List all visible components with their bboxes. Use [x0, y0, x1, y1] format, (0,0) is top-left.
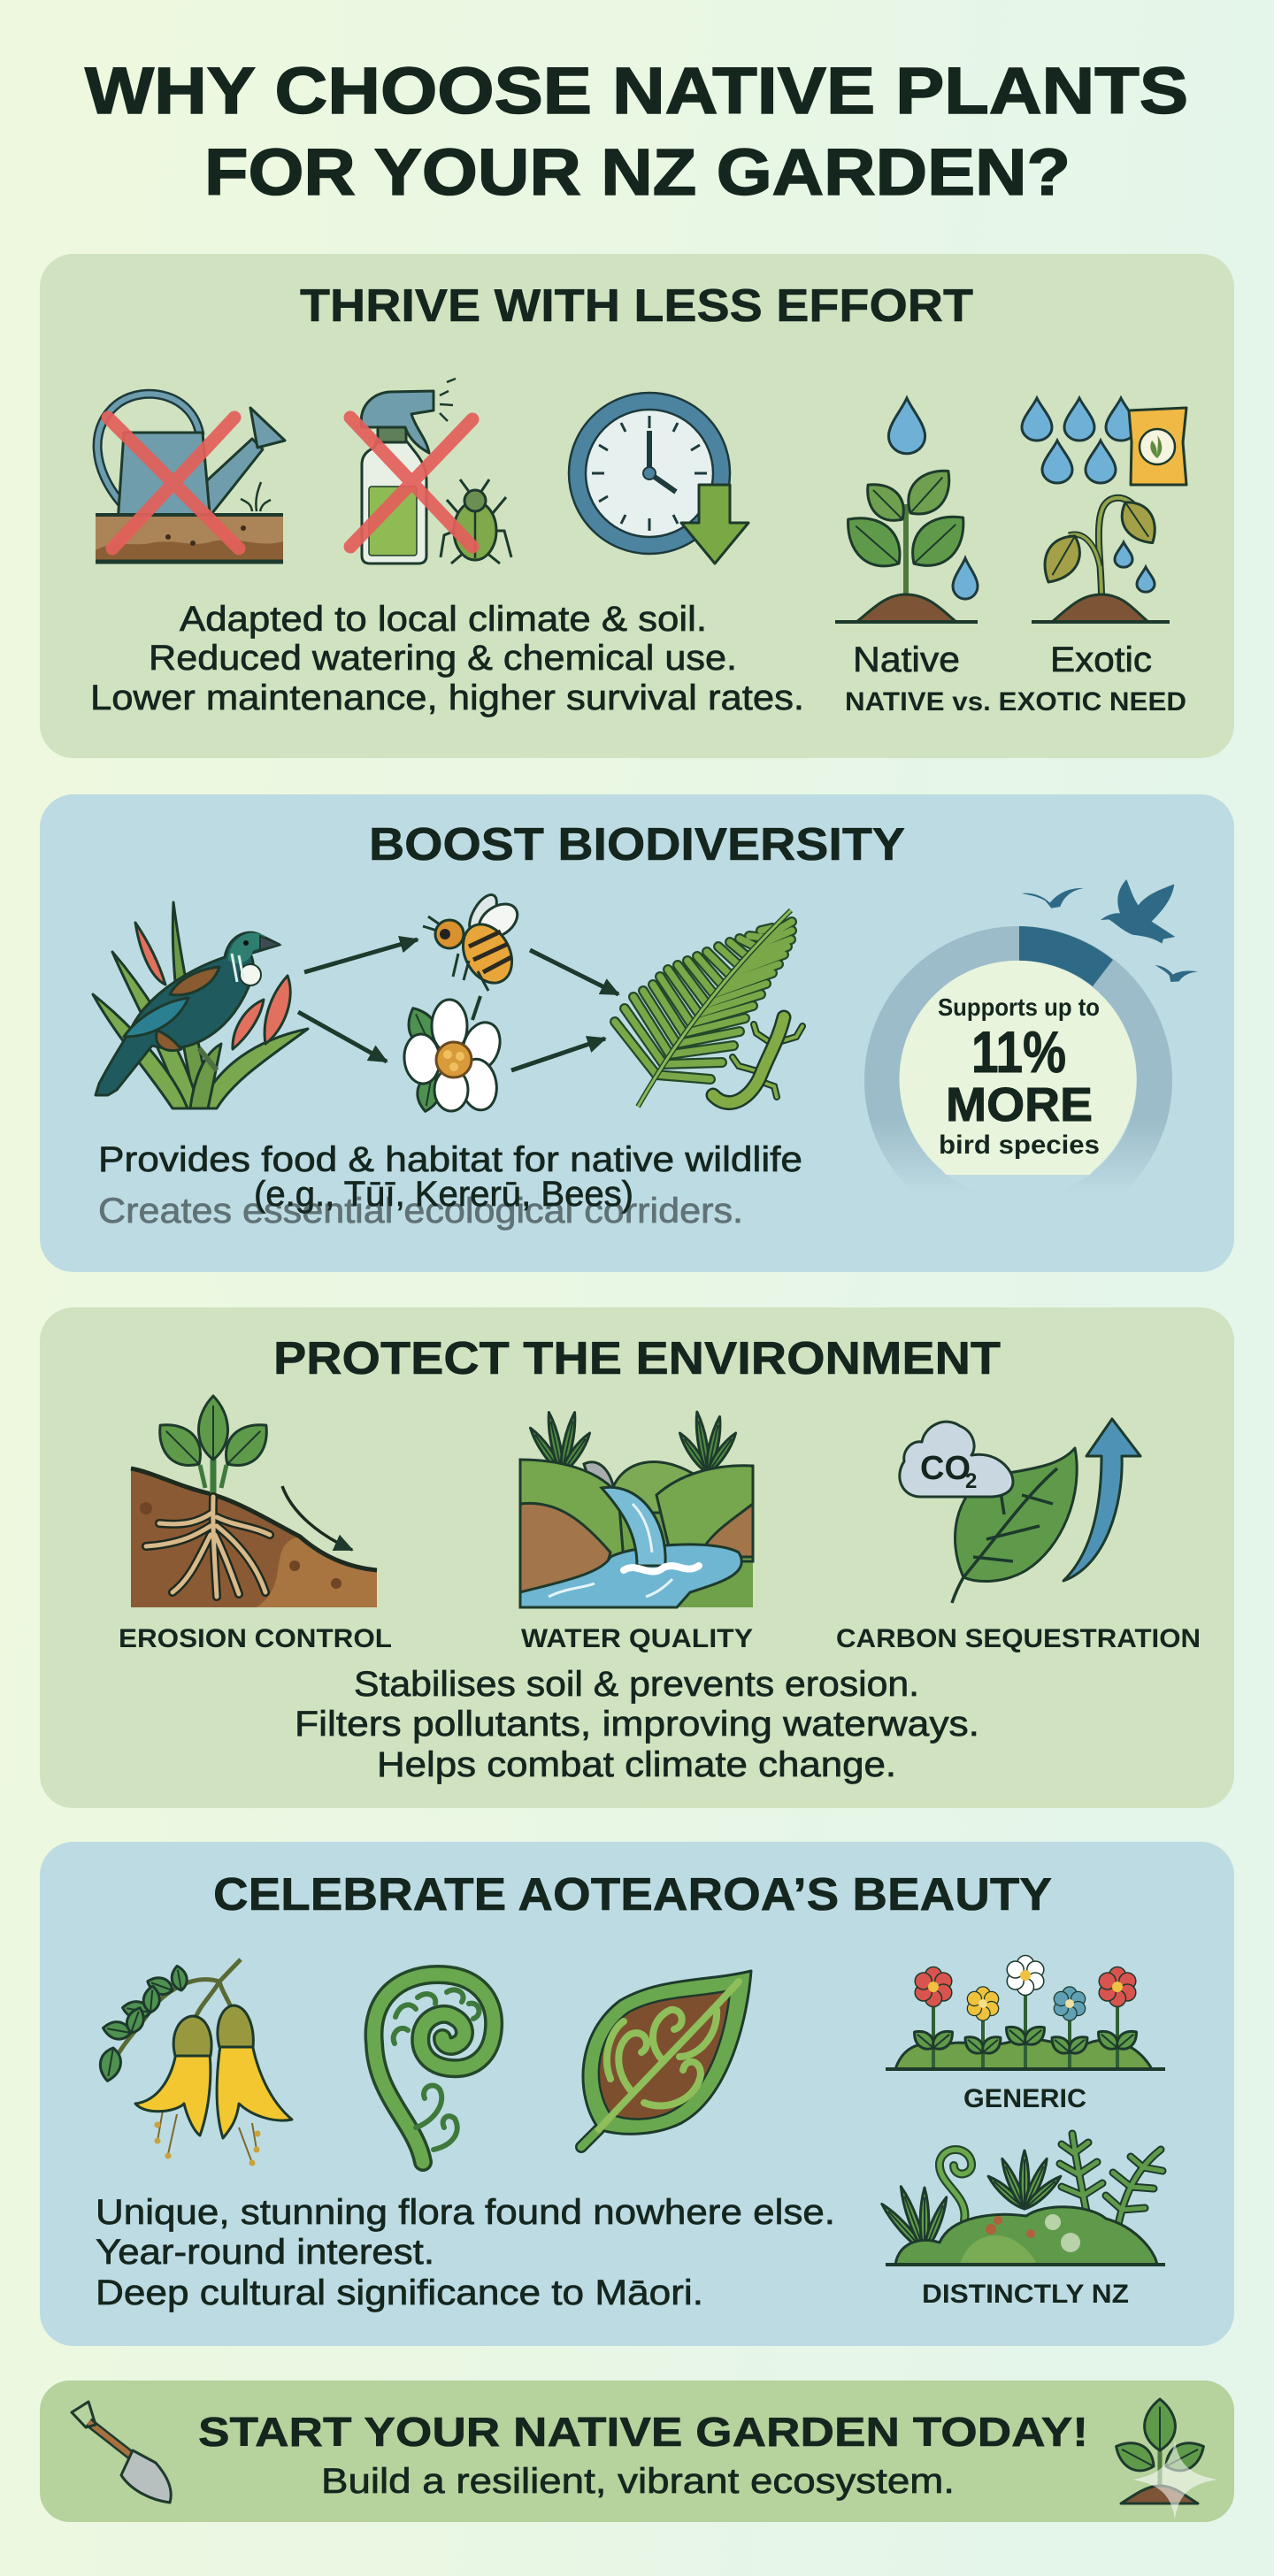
text block: environment: Helps combat climate change.	[377, 1745, 896, 1784]
text block: wildlife: Creates essential ecological corriders.	[98, 1192, 743, 1230]
label: native: Native	[853, 640, 960, 679]
cta subtext: Build a resilient, vibrant ecosystem.	[321, 2462, 955, 2501]
panel: thrive with less effort	[40, 254, 1234, 758]
icon: clock with down arrow	[569, 393, 748, 564]
title: WHY CHOOSE NATIVE PLANTS	[85, 54, 1188, 127]
arrow: flower to fern	[511, 1039, 605, 1070]
icon: exotic plant with drops and fertiliser	[1022, 398, 1186, 622]
arrow: bee to fern	[530, 950, 618, 994]
chart: 11% donut	[882, 926, 1155, 1216]
heading: THRIVE WITH LESS EFFORT	[300, 280, 973, 332]
icon: manuka flower	[401, 1000, 506, 1114]
label: distinctly nz: DISTINCTLY NZ	[922, 2280, 1129, 2309]
text block: benefits: Reduced watering & chemical use.	[149, 639, 737, 678]
text block: wildlife: (e.g., Tūī, Kererū, Bees)	[254, 1175, 633, 1214]
icon: crossed watering can	[96, 394, 285, 564]
label: generic: GENERIC	[963, 2084, 1086, 2113]
text block: wildlife: Provides food & habitat for native wildlife	[98, 1140, 802, 1179]
chart: 11% donut: Supports up to	[938, 993, 1100, 1021]
icon: gecko	[713, 1017, 802, 1103]
icon: kowhai flowers	[97, 1959, 292, 2166]
icon: fern frond	[615, 910, 792, 1107]
icon: birds in flight	[1022, 879, 1198, 982]
text block: beauty: Deep cultural significance to Māori.	[96, 2273, 703, 2312]
text block: environment: Filters pollutants, improving waterways.	[295, 1705, 979, 1744]
label: erosion control: EROSION CONTROL	[119, 1624, 392, 1653]
icon: seedling	[1110, 2399, 1209, 2503]
heading: BOOST BIODIVERSITY	[369, 819, 905, 870]
icon: distinctly NZ garden	[879, 2134, 1165, 2265]
text block: benefits: Adapted to local climate & soil.	[180, 600, 707, 639]
arrow: bird to flower	[298, 1012, 387, 1062]
icon: native plant	[835, 398, 978, 622]
heading: PROTECT THE ENVIRONMENT	[273, 1333, 1001, 1384]
icon: generic flower bed	[886, 1955, 1165, 2069]
icon: bee	[423, 891, 524, 992]
text block: beauty: Year-round interest.	[96, 2233, 434, 2272]
text block: environment	[295, 1665, 979, 1784]
label: exotic: Exotic	[1050, 640, 1152, 679]
text block: wildlife	[98, 1140, 802, 1230]
text block: environment: Stabilises soil & prevents erosion.	[354, 1665, 919, 1704]
text block: beauty: Unique, stunning flora found nowhere else.	[96, 2193, 835, 2232]
icon: carbon sequestration: 2	[965, 1469, 977, 1493]
icon: shovel	[72, 2402, 171, 2503]
panel: boost biodiversity	[40, 794, 1234, 1272]
chart: 11% donut: 11%	[971, 1019, 1066, 1085]
icon: erosion control	[131, 1396, 377, 1607]
watermark sparkle	[1132, 2441, 1217, 2519]
cta heading: START YOUR NATIVE GARDEN TODAY!	[198, 2409, 1088, 2455]
title	[85, 54, 1188, 209]
chart: 11% donut: MORE	[946, 1078, 1093, 1131]
arrow: bird to bee	[304, 939, 418, 972]
panel: call to action	[40, 2380, 1234, 2522]
panel: protect the environment	[40, 1307, 1234, 1808]
connector: flower to bee	[472, 996, 480, 1020]
text block: benefits	[90, 600, 804, 717]
label: native vs exotic need: NATIVE vs. EXOTIC NEED	[845, 687, 1186, 717]
icon: tui bird on flax	[93, 902, 308, 1108]
icon: maori patterned leaf	[581, 1971, 751, 2147]
icon: carbon sequestration: CO	[920, 1450, 971, 1487]
icon: crossed spray bottle with bug	[350, 379, 511, 564]
text block: benefits: Lower maintenance, higher survival rates.	[90, 678, 804, 717]
label: water quality: WATER QUALITY	[521, 1624, 753, 1653]
title: FOR YOUR NZ GARDEN?	[204, 135, 1071, 209]
icon: water quality	[520, 1411, 753, 1607]
text block: beauty	[96, 2193, 835, 2312]
heading: CELEBRATE AOTEAROA’S BEAUTY	[213, 1869, 1052, 1920]
label: carbon sequestration: CARBON SEQUESTRATION	[836, 1624, 1201, 1653]
chart: 11% donut: bird species	[939, 1131, 1100, 1160]
icon: koru fern	[373, 1974, 494, 2162]
icon: carbon sequestration	[900, 1419, 1140, 1603]
panel: celebrate aotearoa's beauty	[40, 1842, 1234, 2346]
